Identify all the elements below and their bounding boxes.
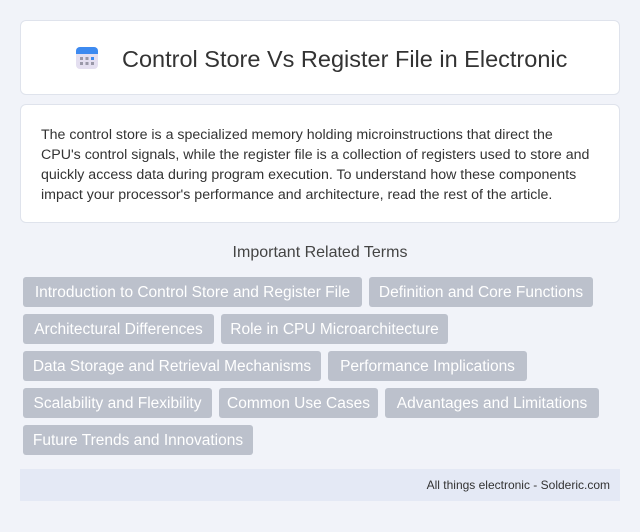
tags: Common Use Cases <box>227 395 370 412</box>
title: Control Store Vs Register File in Electronic <box>122 46 567 72</box>
tags: Performance Implications <box>340 358 515 375</box>
tags: Future Trends and Innovations <box>33 432 243 449</box>
icon: calendar <box>76 47 98 69</box>
tags: Advantages and Limitations <box>397 395 587 412</box>
tags: Introduction to Control Store and Register File <box>35 284 350 301</box>
description card: CPU's control signals, while the register file is a collection of registers used to store and <box>41 147 589 163</box>
footer: All things electronic - Solderic.com <box>427 478 610 492</box>
description card: impact your processor's performance and architecture, read the rest of the article. <box>41 187 552 203</box>
tags: Architectural Differences <box>34 321 203 338</box>
tags: Data Storage and Retrieval Mechanisms <box>33 358 311 375</box>
description card: The control store is a specialized memory holding microinstructions that direct the <box>41 127 553 143</box>
tags: Scalability and Flexibility <box>34 395 202 412</box>
header card <box>20 20 620 95</box>
footer <box>20 469 620 501</box>
heading: related terms: Important Related Terms <box>233 244 407 261</box>
description card <box>20 104 620 223</box>
tags: Role in CPU Microarchitecture <box>230 321 439 338</box>
tags: Definition and Core Functions <box>379 284 583 301</box>
description card: quickly access data during program execution. To understand how these components <box>41 167 576 183</box>
